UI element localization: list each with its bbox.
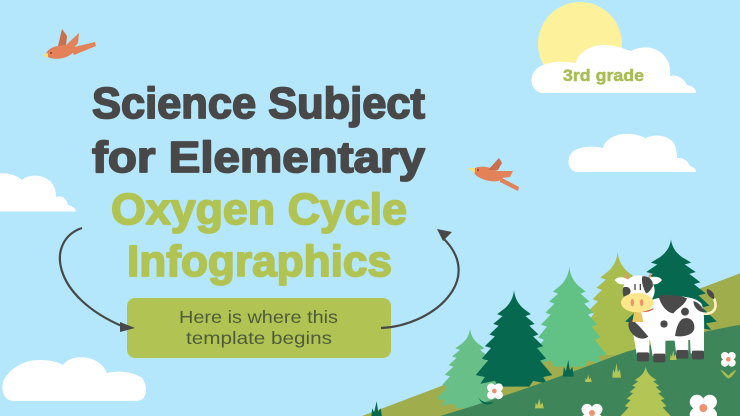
text: 3rd grade: 3rd grade xyxy=(563,66,644,85)
icon: sun xyxy=(538,2,622,86)
cow ears xyxy=(615,277,662,284)
cow horns xyxy=(624,272,652,279)
cow muzzle xyxy=(621,293,654,312)
title line 4: Infographics xyxy=(127,237,392,286)
title line 3: Oxygen Cycle xyxy=(111,185,407,234)
icon: cow xyxy=(615,272,715,362)
grass tufts xyxy=(371,350,677,416)
flower: left xyxy=(487,383,503,399)
tree: olive xyxy=(578,252,657,355)
landscape xyxy=(357,239,740,416)
flower: stem right xyxy=(721,370,736,378)
arrow: right curve xyxy=(381,229,459,328)
title line 2: for Elementary xyxy=(92,133,426,182)
cloud: right xyxy=(569,134,696,172)
icon: bird upper left xyxy=(42,29,96,61)
tree: light green left xyxy=(437,328,503,408)
flower: bottom large xyxy=(690,395,717,416)
panel: subtitle box xyxy=(127,298,391,358)
cow spots xyxy=(628,295,704,339)
cow collar xyxy=(635,309,653,311)
front hill xyxy=(433,325,740,416)
arrow: left curve xyxy=(60,228,135,332)
back hill xyxy=(357,273,740,416)
cow eyes xyxy=(635,284,640,290)
tree: dark behind cow xyxy=(625,239,717,333)
tree: dark left xyxy=(476,290,552,387)
cloud: left edge xyxy=(0,173,76,212)
cow head patches xyxy=(623,276,653,297)
tree: foreground xyxy=(621,366,671,416)
cow hooves xyxy=(637,350,704,362)
cow body and legs xyxy=(633,296,704,356)
flower: right xyxy=(721,352,736,367)
cloud: bottom left xyxy=(2,357,146,401)
cow nostrils xyxy=(631,299,634,306)
cow bell xyxy=(632,312,643,322)
title xyxy=(92,79,426,286)
subtitle line 2: template begins xyxy=(186,328,332,348)
cow tail xyxy=(702,298,715,314)
tree: medium green xyxy=(532,267,607,367)
cow head xyxy=(623,275,655,306)
cloud: grade label cloud xyxy=(532,45,696,93)
flower: bottom small xyxy=(582,404,602,416)
title line 1: Science Subject xyxy=(92,79,425,128)
subtitle line 1: Here is where this xyxy=(179,307,338,327)
icon: bird middle xyxy=(467,158,519,191)
